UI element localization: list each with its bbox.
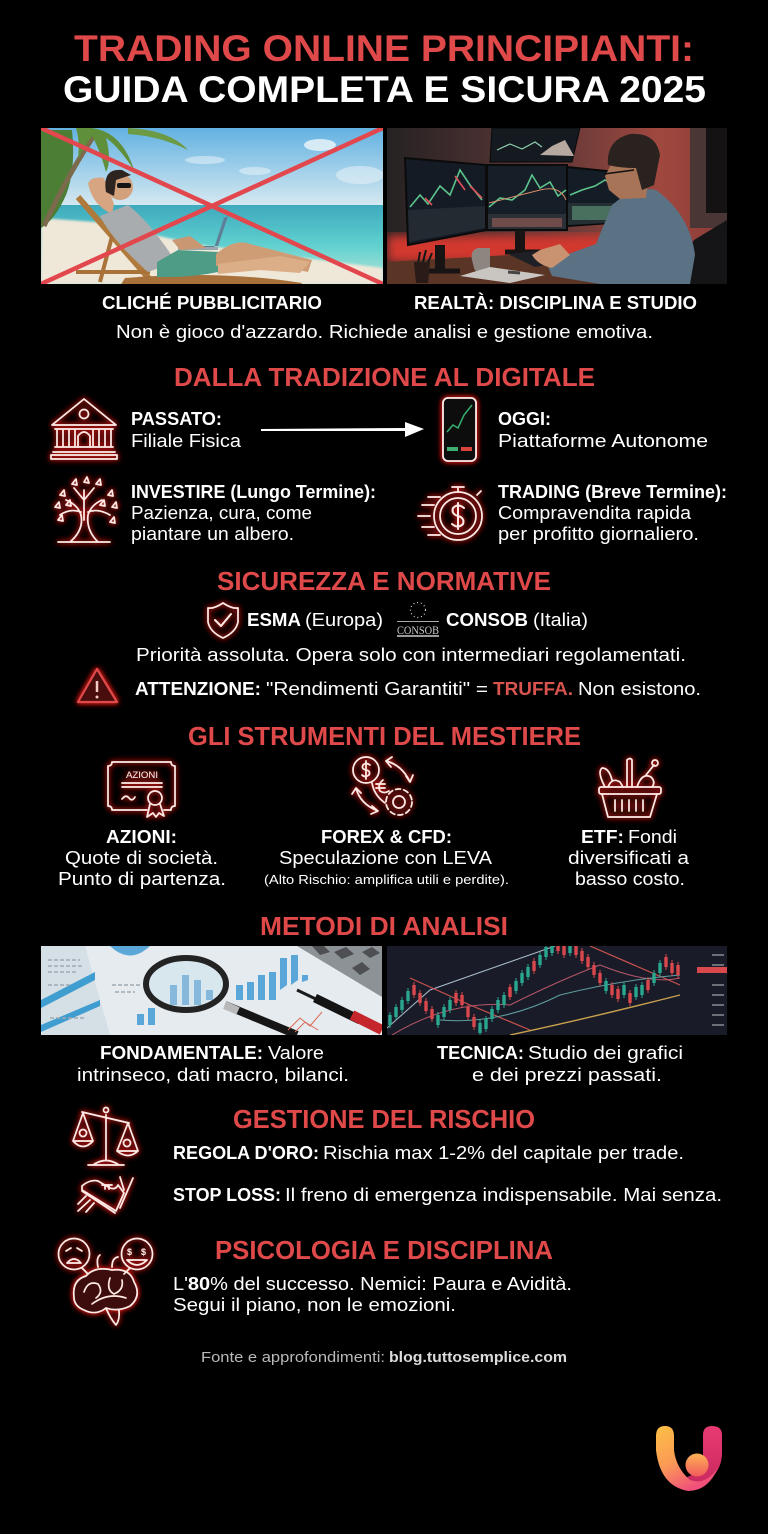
text: psychology: Segui il piano, non le emozioni. xyxy=(173,1295,456,1315)
text: forex and cfd: (Alto Rischio: amplifica utili e perdite). xyxy=(264,872,509,887)
icon: share certificate: AZIONI xyxy=(126,770,158,780)
text: forex and cfd xyxy=(264,827,509,887)
text: fundamental analysis: FONDAMENTALE: xyxy=(100,1043,263,1063)
icon: forex exchange xyxy=(352,757,413,815)
text: oggi xyxy=(498,409,708,451)
text: consob: CONSOB xyxy=(446,610,528,630)
icon: bank xyxy=(51,399,117,459)
icon: smartphone xyxy=(443,398,476,461)
text: etf: basso costo. xyxy=(575,869,685,889)
text: etf: Fondi xyxy=(628,827,677,847)
text: investire: Pazienza, cura, come xyxy=(131,503,312,523)
text: azioni: Punto di partenza. xyxy=(58,869,226,889)
icon: consob logo: CONSOB xyxy=(397,623,439,637)
text: consob: (Italia) xyxy=(533,610,588,630)
text: etf xyxy=(568,827,690,889)
caption row: cliche vs reality: Non è gioco d'azzardo. Richiede analisi e gestione emotiva. xyxy=(116,322,653,342)
trader xyxy=(532,134,727,284)
text: scam warning xyxy=(135,679,701,699)
icon: stopwatch xyxy=(418,487,482,540)
icon: warning triangle xyxy=(78,669,117,702)
icon: etf basket xyxy=(599,758,661,817)
text: esma xyxy=(247,610,383,630)
heading: gestione del rischio: GESTIONE DEL RISCHIO xyxy=(233,1104,535,1134)
icon: brain with fear and greed: $ xyxy=(141,1247,146,1257)
heading: metodi di analisi: METODI DI ANALISI xyxy=(260,911,508,941)
text: esma: (Europa) xyxy=(305,610,383,630)
red cross xyxy=(41,128,383,284)
text: consob xyxy=(446,610,588,630)
logo xyxy=(656,1426,722,1491)
text: fundamental analysis: intrinseco, dati macro, bilanci. xyxy=(77,1065,349,1085)
text: psychology xyxy=(173,1274,572,1315)
text: fundamental analysis xyxy=(77,1043,349,1085)
text: etf: diversificati a xyxy=(568,848,690,868)
caption row: cliche vs reality: REALTÀ: DISCIPLINA E STUDIO xyxy=(414,292,697,313)
text: passato: Filiale Fisica xyxy=(131,431,242,451)
desk items xyxy=(414,248,545,283)
text: golden rule: REGOLA D'ORO: xyxy=(173,1143,319,1163)
text: technical analysis: Studio dei grafici xyxy=(528,1043,683,1063)
heading: gli strumenti del mestiere: GLI STRUMENTI DEL MESTIERE xyxy=(188,721,581,751)
photo: trader at monitors xyxy=(387,128,727,284)
footer source: blog.tuttosemplice.com xyxy=(389,1349,567,1366)
caption row: cliche vs reality: CLICHÉ PUBBLICITARIO xyxy=(102,292,322,313)
icon: balance scale xyxy=(73,1108,138,1165)
text: azioni xyxy=(58,827,226,889)
text: golden rule xyxy=(173,1143,684,1163)
text: trading: TRADING (Breve Termine): xyxy=(498,482,727,502)
text: technical analysis: e dei prezzi passati. xyxy=(472,1065,662,1085)
text: forex and cfd: Speculazione con LEVA xyxy=(279,848,492,868)
text: regulated brokers: Priorità assoluta. Opera solo con intermediari regolamentati. xyxy=(136,645,686,665)
title: TRADING ONLINE PRINCIPIANTI: xyxy=(74,28,694,69)
chair xyxy=(76,197,302,286)
heading: dalla tradizione al digitale: DALLA TRADIZIONE AL DIGITALE xyxy=(174,362,595,392)
text: scam warning: Non esistono. xyxy=(578,679,701,699)
text: passato: PASSATO: xyxy=(131,409,222,429)
text: azioni: AZIONI: xyxy=(106,827,177,847)
text: investire: INVESTIRE (Lungo Termine): xyxy=(131,482,376,502)
text: psychology: L'80% del successo. Nemici: Paura e Avidità. xyxy=(173,1274,572,1294)
text: trading: Compravendita rapida xyxy=(498,503,692,523)
icon: consob logo xyxy=(397,602,439,637)
text: trading xyxy=(498,482,727,544)
text: azioni: Quote di società. xyxy=(65,848,218,868)
text: investire xyxy=(131,482,376,544)
text: trading: per profitto giornaliero. xyxy=(498,524,699,544)
text: oggi: OGGI: xyxy=(498,409,551,429)
monitors xyxy=(405,128,626,271)
text: fundamental analysis: Valore xyxy=(268,1043,324,1063)
heading: sicurezza e normative: SICUREZZA E NORMATIVE xyxy=(217,566,551,596)
footer source: Fonte e approfondimenti: xyxy=(201,1349,385,1366)
text: esma: ESMA xyxy=(247,610,301,630)
arrow: past to today xyxy=(261,422,424,437)
text: passato xyxy=(131,409,242,451)
title xyxy=(63,28,706,110)
text: etf: ETF: xyxy=(581,827,624,847)
photo: beach cliche crossed out xyxy=(41,128,384,286)
icon: shield xyxy=(208,603,238,638)
man xyxy=(88,170,312,277)
text: stop loss: STOP LOSS: xyxy=(173,1185,281,1205)
photo: fundamental analysis desk xyxy=(41,946,382,1035)
text: scam warning: TRUFFA. xyxy=(493,679,573,699)
icon: brain with fear and greed xyxy=(58,1238,152,1325)
icon: brain with fear and greed: $ xyxy=(127,1247,132,1257)
text: stop loss: Il freno di emergenza indispensabile. Mai senza. xyxy=(285,1185,722,1205)
icon: foot on brake xyxy=(78,1177,133,1213)
title: GUIDA COMPLETA E SICURA 2025 xyxy=(63,69,706,110)
icon: tree xyxy=(55,477,117,542)
icon: share certificate xyxy=(108,762,175,817)
caption row: cliche vs reality xyxy=(102,292,697,342)
heading: psicologia e disciplina: PSICOLOGIA E DISCIPLINA xyxy=(215,1235,553,1265)
text: investire: piantare un albero. xyxy=(131,524,294,544)
text: forex and cfd: FOREX & CFD: xyxy=(321,827,452,847)
text: oggi: Piattaforme Autonome xyxy=(498,431,708,451)
text: scam warning: "Rendimenti Garantiti" = xyxy=(266,679,488,699)
footer source xyxy=(201,1349,567,1366)
text: scam warning: ATTENZIONE: xyxy=(135,679,261,699)
photo: candlestick chart xyxy=(387,938,727,1036)
text: technical analysis: TECNICA: xyxy=(437,1043,524,1063)
text: technical analysis xyxy=(437,1043,683,1085)
text: golden rule: Rischia max 1-2% del capitale per trade. xyxy=(323,1143,684,1163)
